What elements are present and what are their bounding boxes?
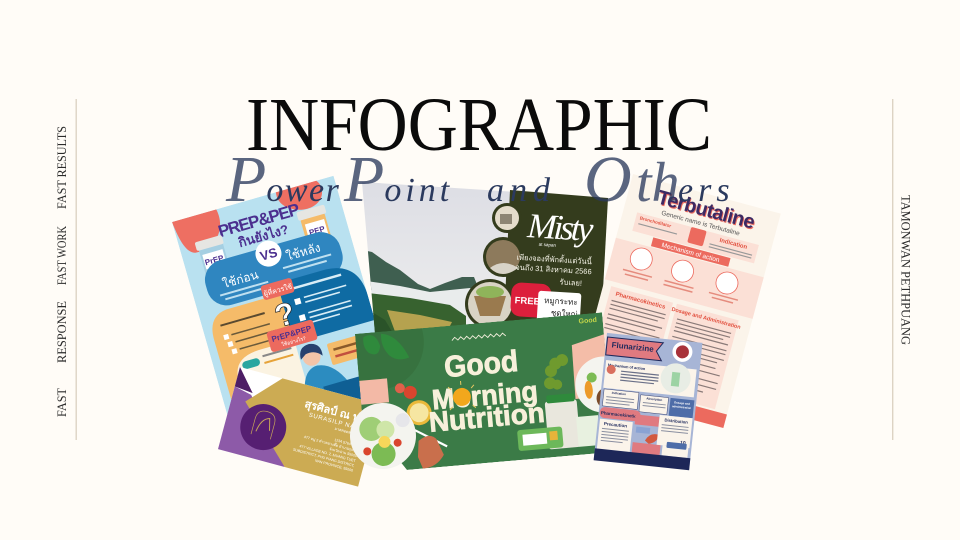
small logo: Good (578, 317, 597, 325)
VS badge (255, 240, 282, 267)
dark green panel (503, 190, 608, 345)
left vertical tagline: RESPONSE (54, 301, 69, 363)
pill bottle left (195, 235, 227, 274)
mechanism captions (622, 269, 738, 305)
contact lines (291, 428, 361, 473)
distribution panel (657, 415, 693, 448)
supplement box (576, 415, 601, 447)
poster heading: Terbutaline (656, 188, 758, 235)
script subtitle: P (343, 143, 384, 216)
pill bottle right: PEP (308, 224, 327, 237)
supplement jar (544, 393, 581, 450)
promotion text: เพียงจองที่พักตั้งแต่วันนี้ (516, 252, 593, 266)
salad plate (347, 400, 419, 472)
question mark: ? (271, 294, 299, 334)
coral blobs (172, 210, 220, 253)
poster heading: PREP&PEP (216, 200, 302, 241)
distribution panel: 10 (680, 440, 686, 447)
excretion panel (662, 441, 689, 458)
script subtitle: and (487, 172, 556, 209)
mechanism band (605, 238, 764, 319)
poster: PrEP and PEP: กินยังไง? (236, 221, 290, 250)
left vertical tagline (54, 126, 69, 417)
pharmacokinetics panel: Pharmacokinetics (615, 292, 667, 311)
script subtitle: O (584, 143, 632, 216)
top summary band: Indication (719, 238, 748, 251)
main dish plate (575, 356, 604, 412)
lower panels (238, 320, 375, 384)
use before and after band: ใช้หลัง (285, 240, 322, 264)
hand holding fork (415, 429, 448, 468)
name: SURASILP NA NAN (308, 413, 371, 435)
indication panel: Indication (612, 391, 626, 396)
purple corner (218, 386, 301, 467)
left vertical tagline: FAST RESULTS (54, 126, 69, 209)
promotion text (514, 252, 593, 288)
slide heading: Nutrition (428, 397, 546, 438)
pharmacokinetics pill: Pharmacokinetics (601, 410, 640, 419)
top summary band (632, 212, 759, 263)
VS badge: VS (258, 244, 279, 264)
free badge: ชุดใหญ่ (551, 308, 578, 319)
contact lines: 477 VILLAGE NO. 2, MUANG TUET (299, 444, 357, 463)
distribution panel: Distribution (664, 417, 689, 425)
dosage panel: administration (672, 404, 692, 410)
script subtitle: oint (384, 172, 453, 209)
at risk panel blue (280, 268, 374, 336)
business card: Surasilp Na Nan (218, 367, 380, 487)
sun icon (448, 380, 476, 410)
pink paper left (359, 378, 389, 405)
dosage panel (669, 398, 694, 418)
script subtitle: th (636, 152, 680, 214)
contact lines: NAN PROVINCE, 55000 (314, 459, 354, 473)
slide heading (430, 349, 544, 432)
top summary band: Bronchodilator (639, 215, 672, 229)
gold panel (232, 371, 380, 487)
mechanism heading (651, 237, 731, 267)
Misty logo: at sapan (539, 242, 557, 248)
main title: INFOGRAPHIC (246, 83, 712, 167)
mechanism icons (628, 246, 741, 297)
name (300, 397, 375, 441)
receptor circle (659, 362, 692, 395)
free badge: หมูกระทะ (544, 296, 578, 308)
slide heading: Morning (431, 375, 539, 415)
design and administration panel: Dosage and Administration (671, 307, 742, 331)
at risk panel orange (212, 296, 290, 400)
slide: Good Morning Nutrition (350, 312, 606, 470)
dark purple corner (234, 367, 258, 393)
bottom coral bar (672, 401, 727, 428)
photo: misty mountains (362, 182, 510, 332)
promotion text: รับเลย! (559, 277, 582, 288)
butter dish (406, 400, 432, 426)
right vertical divider (892, 99, 893, 440)
precaution panel: Precaution (604, 421, 628, 429)
illustration: woman taking pill (300, 344, 347, 390)
dark corner shade (355, 328, 424, 388)
absorption panel: Absorption (646, 396, 663, 402)
script subtitle: ower (266, 172, 340, 209)
contact lines: จังหวัดน่าน 55000 (329, 447, 357, 458)
contact lines: 1234 5764 2563 (334, 438, 360, 449)
use before and after band (204, 232, 343, 306)
free badge: FREE! (514, 295, 543, 308)
promotion text: จนถึง 31 สิงหาคม 2566 (515, 263, 592, 276)
who should use label: ผู้ที่ควรใช้ (263, 282, 293, 298)
poster heading: Terbutaline (655, 187, 757, 234)
left vertical divider (76, 99, 77, 440)
right vertical author name: TAMONWAN PETHPUANG (898, 195, 914, 345)
food circle (671, 341, 693, 363)
script subtitle: ers (678, 172, 735, 209)
Misty logo: Misty (525, 206, 595, 249)
contact lines: SUBDISTRICT, PHU PIANG DISTRICT, (292, 448, 355, 468)
spinach leaves (363, 334, 409, 360)
pink paper right (572, 334, 606, 399)
script subtitle: P (225, 143, 266, 216)
poster: PrEP and PEP (172, 176, 375, 414)
wavy decoration (452, 333, 506, 341)
poster heading: Generic name is Terbutaline (661, 210, 741, 238)
design and administration panel (650, 303, 743, 410)
use before and after band: ใช้ก่อน (221, 268, 260, 291)
photo circles (492, 203, 522, 233)
slide heading: Good (443, 345, 519, 384)
name: สุรศิลป์ ณ น่าน (303, 397, 375, 429)
pill bottle left: PrEP (204, 253, 225, 267)
broccoli (544, 354, 568, 390)
orange note (327, 336, 358, 365)
how to use label: ใช้อย่างไร? (281, 335, 307, 348)
dark blue footer strip (323, 376, 361, 400)
name: มาสคอตสายพันธุ์น่าน (334, 426, 370, 441)
pill bottle right (296, 204, 331, 236)
pharmacokinetics panel (583, 286, 673, 407)
who should use label (260, 277, 295, 301)
poster: Terbutaline (576, 174, 781, 428)
header ribbon: Flunarizine (611, 340, 655, 354)
contact lines: 477 หมู่ 2 ตำบลม่วงตึ๊ด อำเภอภูเพียง (303, 433, 359, 453)
mechanism heading: Mechanism of action (661, 242, 721, 264)
tomatoes (394, 383, 417, 399)
left vertical tagline: FAST (54, 388, 69, 417)
how to use label: PrEP&PEP (271, 324, 313, 344)
green pack (517, 426, 564, 451)
free badge (509, 282, 582, 333)
logo circle (235, 399, 291, 455)
mechanism panel: Mechanism of action (608, 363, 646, 371)
navy footer (594, 448, 690, 470)
metabolism panel (632, 414, 663, 456)
left vertical tagline: FAST WORK (54, 226, 69, 285)
how to use label (266, 319, 318, 353)
poster: Flunarizine (594, 333, 702, 470)
dosage panel: Dosage and (674, 400, 690, 406)
poster: Misty at Sapan (362, 182, 608, 332)
